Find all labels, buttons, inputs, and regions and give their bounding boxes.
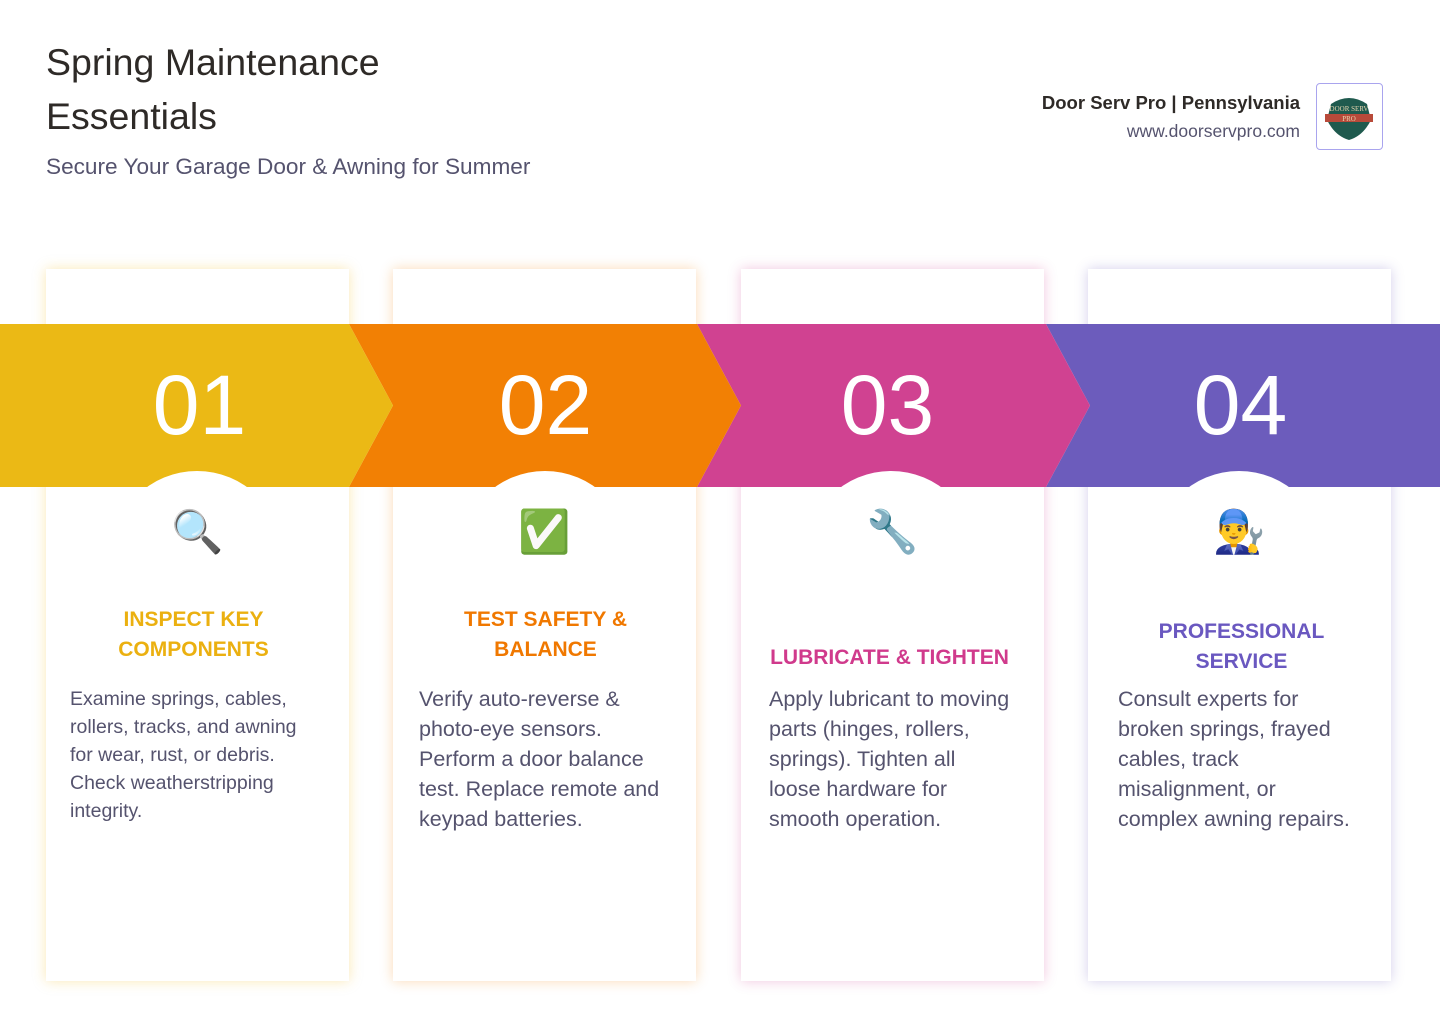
logo: PRO xyxy=(1342,115,1356,123)
heading 3: LUBRICATE & TIGHTEN xyxy=(770,646,1009,669)
heading 2 xyxy=(464,608,627,661)
body 1 xyxy=(70,688,297,822)
body 1: integrity. xyxy=(70,800,142,822)
title: Spring Maintenance xyxy=(46,41,380,83)
heading 4: PROFESSIONAL xyxy=(1159,620,1324,643)
heading 2: BALANCE xyxy=(494,638,597,661)
heading 2: TEST SAFETY & xyxy=(464,608,627,631)
heading 4 xyxy=(1159,620,1324,673)
body 3: Apply lubricant to moving xyxy=(769,687,1009,711)
circle tabs xyxy=(111,471,283,643)
subtitle: Secure Your Garage Door & Awning for Summer xyxy=(46,154,530,179)
body 3 xyxy=(769,687,1009,831)
logo xyxy=(1316,83,1383,150)
body 4: broken springs, frayed xyxy=(1118,717,1331,741)
body 3: parts (hinges, rollers, xyxy=(769,717,970,741)
icon: check: ✅ xyxy=(518,508,571,557)
body 4: cables, track xyxy=(1118,747,1239,771)
logo: DOOR SERV xyxy=(1330,105,1368,113)
body 2: Verify auto-reverse & xyxy=(419,687,620,711)
title xyxy=(46,41,380,137)
heading 1: INSPECT KEY xyxy=(123,608,264,631)
body 3: smooth operation. xyxy=(769,807,941,831)
body 2: test. Replace remote and xyxy=(419,777,659,801)
body 2 xyxy=(419,687,659,831)
brand block: www.doorservpro.com xyxy=(1127,121,1300,141)
step numbers: 01 xyxy=(153,358,246,452)
body 1: for wear, rust, or debris. xyxy=(70,744,275,766)
card 1 xyxy=(46,269,349,981)
body 3: loose hardware for xyxy=(769,777,947,801)
body 2: photo-eye sensors. xyxy=(419,717,602,741)
body 2: keypad batteries. xyxy=(419,807,583,831)
icon: mechanic: 👨‍🔧 xyxy=(1213,508,1266,557)
icon: magnifier: 🔍 xyxy=(171,508,224,557)
heading 4: SERVICE xyxy=(1196,650,1287,673)
arrow band xyxy=(0,324,1440,487)
body 1: rollers, tracks, and awning xyxy=(70,716,297,738)
text: 02 xyxy=(499,358,592,452)
body 2: Perform a door balance xyxy=(419,747,644,771)
icon: wrench: 🔧 xyxy=(866,508,919,557)
brand block: Door Serv Pro | Pennsylvania xyxy=(1042,92,1300,113)
body 3: springs). Tighten all xyxy=(769,747,955,771)
body 4: complex awning repairs. xyxy=(1118,807,1350,831)
heading 1 xyxy=(118,608,269,661)
card 3 xyxy=(741,269,1044,981)
text: 03 xyxy=(841,358,934,452)
body 1: Examine springs, cables, xyxy=(70,688,287,710)
brand block xyxy=(1042,92,1300,141)
heading 1: COMPONENTS xyxy=(118,638,269,661)
body 4: Consult experts for xyxy=(1118,687,1298,711)
body 4: misalignment, or xyxy=(1118,777,1276,801)
text: 04 xyxy=(1194,358,1287,452)
body 4 xyxy=(1118,687,1350,831)
card 4 xyxy=(1088,269,1391,981)
title: Essentials xyxy=(46,95,217,137)
card 2 xyxy=(393,269,696,981)
body 1: Check weatherstripping xyxy=(70,772,274,794)
